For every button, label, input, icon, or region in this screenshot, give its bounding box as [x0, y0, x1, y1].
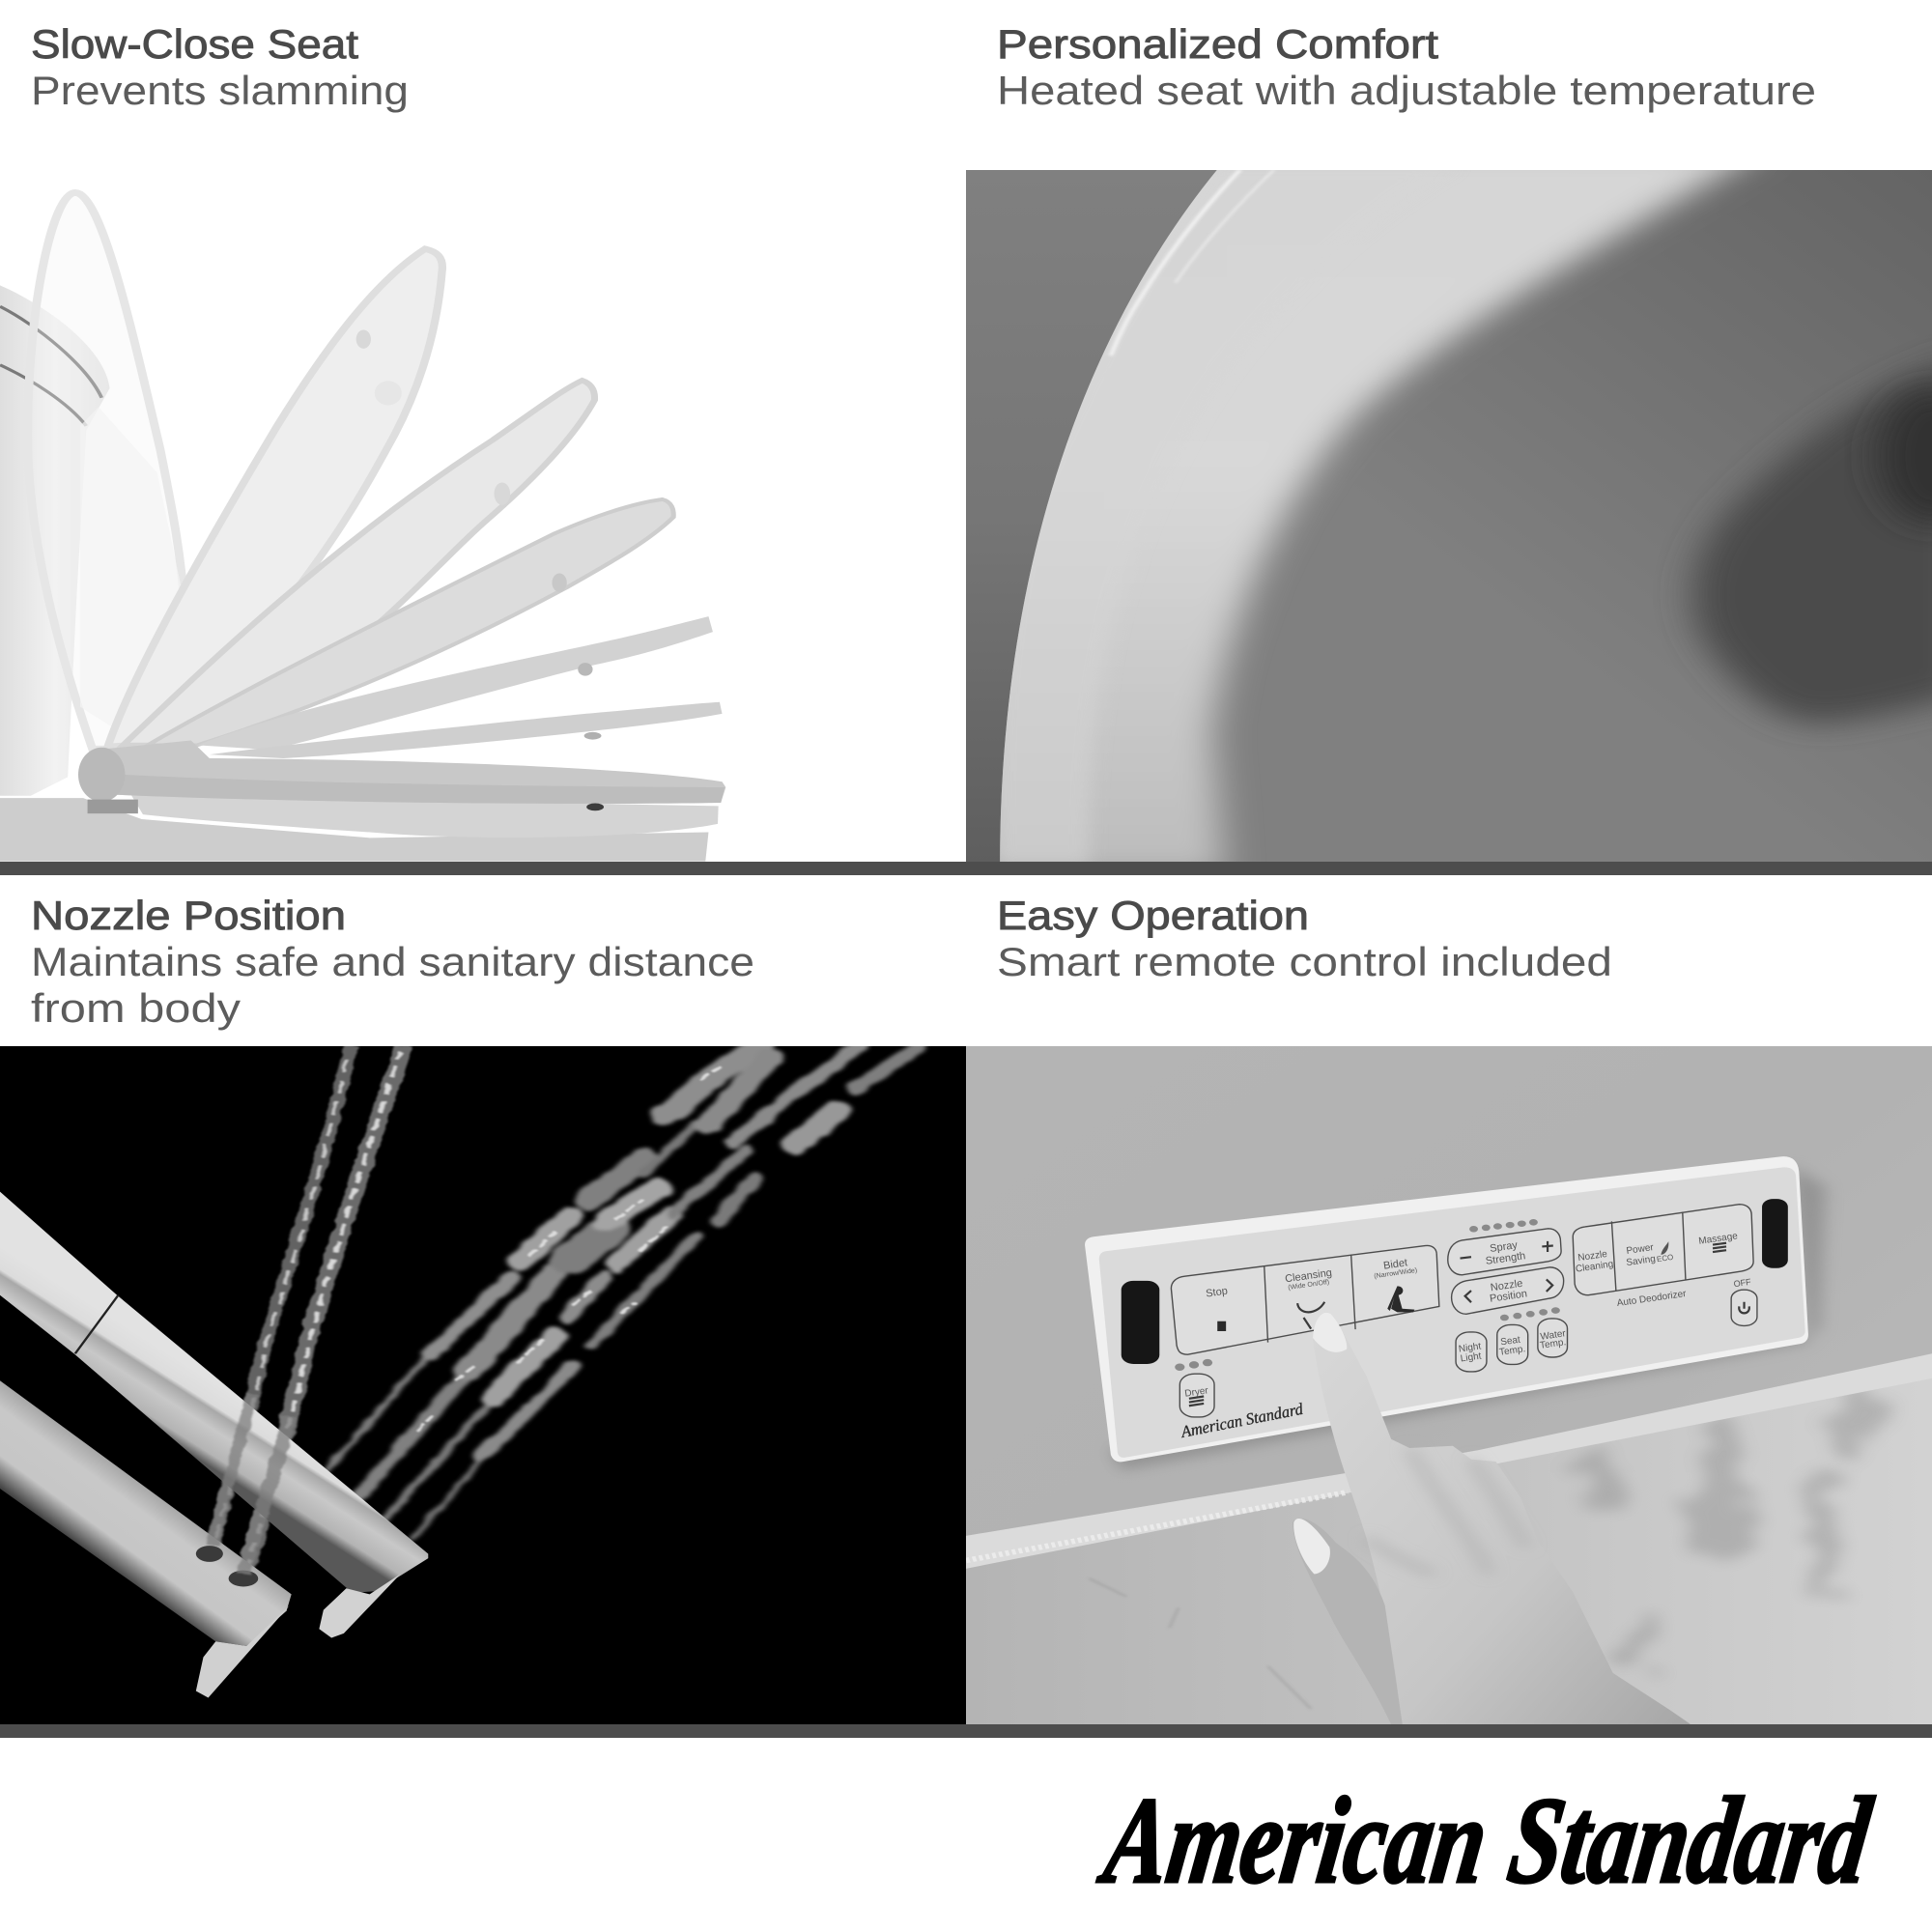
upper nozzle tip	[319, 1574, 401, 1638]
remote button labels: Position	[1489, 1288, 1528, 1305]
remote button labels: (Wide On/Off)	[1288, 1279, 1330, 1292]
remote button labels: Saving	[1626, 1254, 1657, 1268]
heading block: personalized comfort	[997, 21, 1816, 113]
remote button labels: Nozzle	[1490, 1278, 1523, 1293]
position pill	[1452, 1267, 1564, 1314]
remote button labels: Power	[1626, 1242, 1655, 1257]
hinge barrel	[78, 748, 125, 802]
remote button labels: Spray	[1490, 1239, 1519, 1255]
heading: Nozzle Position	[31, 893, 346, 938]
backsplash ledge	[966, 1353, 1932, 1569]
spray streams: fan	[327, 1045, 918, 1538]
remote button labels: Bidet	[1382, 1257, 1408, 1272]
remote button labels: Cleansing	[1285, 1267, 1333, 1285]
panel: smart remote control	[966, 1043, 1932, 1731]
remote button labels: Nozzle	[1577, 1249, 1608, 1264]
remote button labels: Seat	[1500, 1335, 1521, 1348]
remote shadow	[1111, 1165, 1826, 1470]
bowl interior	[1000, 164, 1932, 867]
heading: Easy Operation	[997, 893, 1309, 938]
seat ring	[966, 146, 1767, 875]
lid bumpers	[356, 329, 601, 740]
lower nozzle wand	[0, 1380, 292, 1646]
divider band lower	[0, 1724, 1932, 1738]
lid position 2	[108, 249, 442, 747]
remote button labels: OFF	[1733, 1277, 1752, 1289]
brand logo: American	[1093, 1772, 1495, 1909]
heading: Slow-Close Seat	[31, 21, 358, 67]
ledge speckle	[966, 1492, 1348, 1560]
remote button labels: Cleaning	[1575, 1259, 1614, 1275]
fingernails	[1293, 1313, 1347, 1574]
toilet rim line	[0, 306, 101, 426]
toilet tank and bowl	[0, 285, 110, 796]
remote button labels: Light	[1460, 1351, 1482, 1364]
main button group	[1171, 1245, 1439, 1354]
description: Prevents slamming	[31, 68, 409, 113]
lower nozzle tip	[196, 1605, 290, 1697]
remote button labels: Auto Deodorizer	[1616, 1289, 1688, 1309]
closed lid front edge	[117, 775, 724, 804]
brand logo	[1093, 1772, 1879, 1909]
spray highlights	[419, 1065, 721, 1430]
infrared sensors	[1122, 1199, 1788, 1364]
nozzle holes	[196, 1546, 258, 1586]
panel background	[966, 170, 1217, 862]
heading block: nozzle position: from body	[31, 985, 241, 1031]
hinge bracket	[88, 800, 138, 813]
upper nozzle seam	[75, 1295, 118, 1353]
small round buttons	[1179, 1290, 1757, 1417]
remote button labels: Strength	[1485, 1250, 1526, 1267]
led indicator dots	[1175, 1219, 1560, 1371]
divider band upper	[0, 862, 1932, 875]
heading block: nozzle position	[31, 893, 754, 1031]
remote button labels: (Narrow/Wide)	[1374, 1267, 1418, 1280]
heading block: easy operation	[997, 893, 1612, 984]
marble veins	[1579, 1385, 1890, 1664]
remote button labels: Dryer	[1184, 1385, 1209, 1400]
remote button labels: Temp.	[1498, 1344, 1526, 1358]
lid position 3	[124, 381, 595, 745]
finger separations	[1367, 1448, 1526, 1574]
description: Maintains safe and sanitary distance	[31, 939, 754, 984]
lid position 6	[210, 702, 723, 758]
ghost lid inner plane	[80, 421, 181, 708]
bumper dark	[586, 803, 604, 810]
toilet base	[0, 798, 708, 862]
ghost upright lid	[28, 192, 185, 749]
panel: heated seat closeup	[966, 146, 1932, 875]
right button group	[1573, 1205, 1753, 1295]
water drain shadow	[1693, 355, 1932, 723]
rim highlight	[1111, 170, 1240, 355]
button icons	[1189, 1241, 1749, 1406]
remote button labels	[1184, 1231, 1752, 1400]
heading block: slow-close seat	[31, 21, 409, 113]
marble backsplash	[966, 1367, 1932, 1731]
upper nozzle wand	[0, 1192, 428, 1593]
thumb	[1293, 1519, 1404, 1731]
panel: toilet seat closing sequence	[0, 192, 725, 862]
description: Smart remote control included	[997, 939, 1612, 984]
second seat ring	[131, 796, 719, 837]
remote face	[1099, 1167, 1805, 1458]
remote button labels: Stop	[1206, 1286, 1229, 1300]
remote body	[1085, 1156, 1808, 1462]
wall	[966, 1043, 1932, 1731]
heading: Personalized Comfort	[997, 21, 1438, 67]
stream overlap on wand	[213, 1394, 290, 1574]
panel: nozzle water spray	[0, 1045, 966, 1724]
remote button labels: ECO	[1656, 1253, 1674, 1264]
closed lid	[104, 741, 725, 804]
remote button labels: Temp.	[1539, 1337, 1567, 1351]
description: Heated seat with adjustable temperature	[997, 68, 1816, 113]
hand	[1313, 1312, 1690, 1731]
spray pill	[1448, 1229, 1561, 1275]
remote logo: American Standard	[1179, 1400, 1305, 1441]
lid position 4	[148, 499, 673, 745]
remote button labels: Night	[1458, 1341, 1482, 1355]
lid position 5	[197, 616, 713, 750]
remote button labels: Water	[1540, 1328, 1567, 1343]
marble thin veins	[1090, 1578, 1311, 1709]
spray streams: vertical pair	[213, 1045, 404, 1578]
remote button labels: Massage	[1698, 1231, 1739, 1247]
